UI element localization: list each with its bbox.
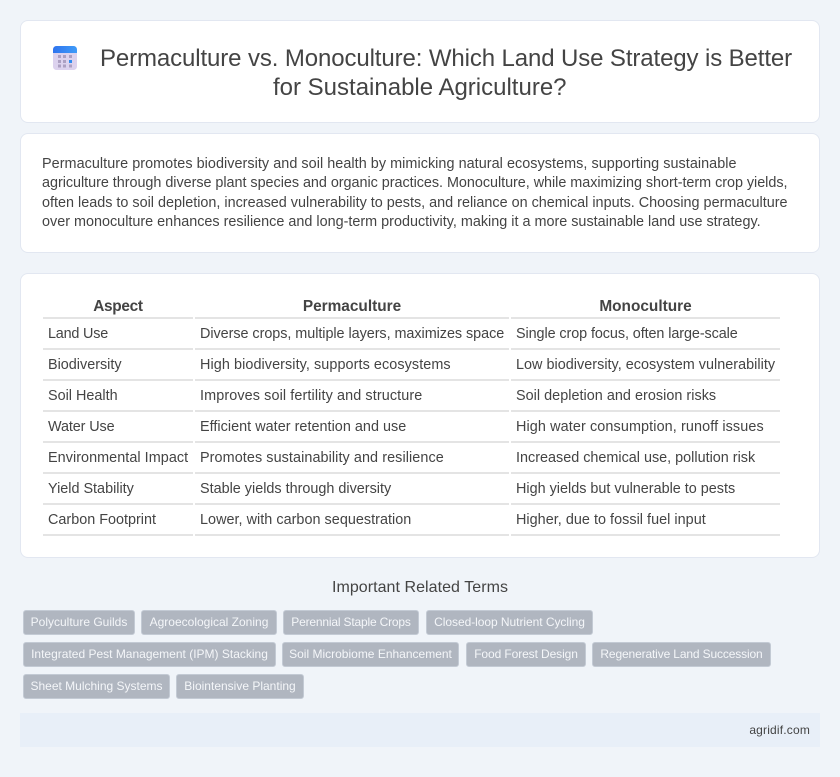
comparison table: Monoculture xyxy=(599,298,692,315)
panel: comparison table card xyxy=(20,273,820,558)
panel: intro text card xyxy=(20,133,820,253)
panel: title card xyxy=(20,20,820,123)
row: carbon footprint: Higher, due to fossil fuel input xyxy=(516,512,706,528)
row: carbon footprint: Lower, with carbon sequestration xyxy=(200,512,411,528)
row: yield stability: High yields but vulnerable to pests xyxy=(516,481,735,497)
row: yield stability: Yield Stability xyxy=(48,481,134,497)
tag xyxy=(23,674,170,699)
row: environmental impact: Environmental Impact xyxy=(48,450,188,466)
row: soil health: Soil Health xyxy=(48,388,118,404)
tag: Soil Microbiome Enhancement xyxy=(289,647,452,661)
row: biodiversity xyxy=(48,357,775,373)
tag: Closed-loop Nutrient Cycling xyxy=(434,615,585,629)
row: biodiversity: Low biodiversity, ecosystem vulnerability xyxy=(516,357,775,373)
row: biodiversity: Biodiversity xyxy=(48,357,122,373)
heading: related terms: Important Related Terms xyxy=(332,579,508,596)
tag: Food Forest Design xyxy=(474,647,578,661)
tag: Sheet Mulching Systems xyxy=(30,679,163,693)
row: environmental impact: Promotes sustainability and resilience xyxy=(200,450,444,466)
table header: Aspect xyxy=(93,298,143,315)
row: carbon footprint xyxy=(48,512,706,528)
intro paragraph: agriculture through diverse plant species and organic practices. Monoculture, while maximizing short-term crop yields, xyxy=(42,175,787,191)
title xyxy=(100,45,792,101)
row: soil health: Soil depletion and erosion risks xyxy=(516,388,716,404)
tag xyxy=(141,610,277,635)
row: water use: High water consumption, runoff issues xyxy=(516,419,764,435)
tag xyxy=(592,642,771,667)
tag xyxy=(23,642,276,667)
tag: Biointensive Planting xyxy=(184,679,296,693)
row: land use: Diverse crops, multiple layers, maximizes space xyxy=(200,326,504,342)
comparison table: Permaculture xyxy=(303,298,401,315)
tag xyxy=(23,610,135,635)
intro paragraph: often leads to soil depletion, increased vulnerability to pests, and reliance on chemical inputs. Choosing permaculture xyxy=(42,195,788,211)
row: environmental impact xyxy=(48,450,756,466)
row: land use: Single crop focus, often large-scale xyxy=(516,326,738,342)
tag xyxy=(426,610,593,635)
row: water use xyxy=(48,419,764,435)
row: land use xyxy=(48,326,738,342)
row: land use: Land Use xyxy=(48,326,108,342)
tag: Agroecological Zoning xyxy=(150,615,268,629)
tag xyxy=(282,642,459,667)
icon: calendar xyxy=(53,46,77,70)
footer bar xyxy=(20,713,820,747)
row: yield stability xyxy=(48,481,735,497)
tag xyxy=(176,674,304,699)
intro paragraph: Permaculture promotes biodiversity and soil health by mimicking natural ecosystems, supporting sustainable xyxy=(42,156,737,172)
tag: Integrated Pest Management (IPM) Stacking xyxy=(31,647,268,661)
row: biodiversity: High biodiversity, supports ecosystems xyxy=(200,357,451,373)
row: carbon footprint: Carbon Footprint xyxy=(48,512,156,528)
title: for Sustainable Agriculture? xyxy=(273,74,567,101)
tag xyxy=(283,610,419,635)
related term tags xyxy=(23,610,771,699)
intro paragraph xyxy=(42,156,788,230)
intro paragraph: over monoculture enhances resilience and long-term productivity, making it a more sustainable land use strategy. xyxy=(42,214,761,230)
footer source: agridif.com xyxy=(749,723,810,737)
tag xyxy=(466,642,586,667)
row: soil health xyxy=(48,388,716,404)
tag: Polyculture Guilds xyxy=(31,615,127,629)
title: Permaculture vs. Monoculture: Which Land Use Strategy is Better xyxy=(100,45,792,72)
row: water use: Water Use xyxy=(48,419,115,435)
row: soil health: Improves soil fertility and structure xyxy=(200,388,422,404)
comparison table xyxy=(43,298,780,536)
row: yield stability: Stable yields through diversity xyxy=(200,481,391,497)
tag: Regenerative Land Succession xyxy=(600,647,763,661)
row: environmental impact: Increased chemical use, pollution risk xyxy=(516,450,755,466)
tag: Perennial Staple Crops xyxy=(291,615,411,629)
row: water use: Efficient water retention and use xyxy=(200,419,406,435)
